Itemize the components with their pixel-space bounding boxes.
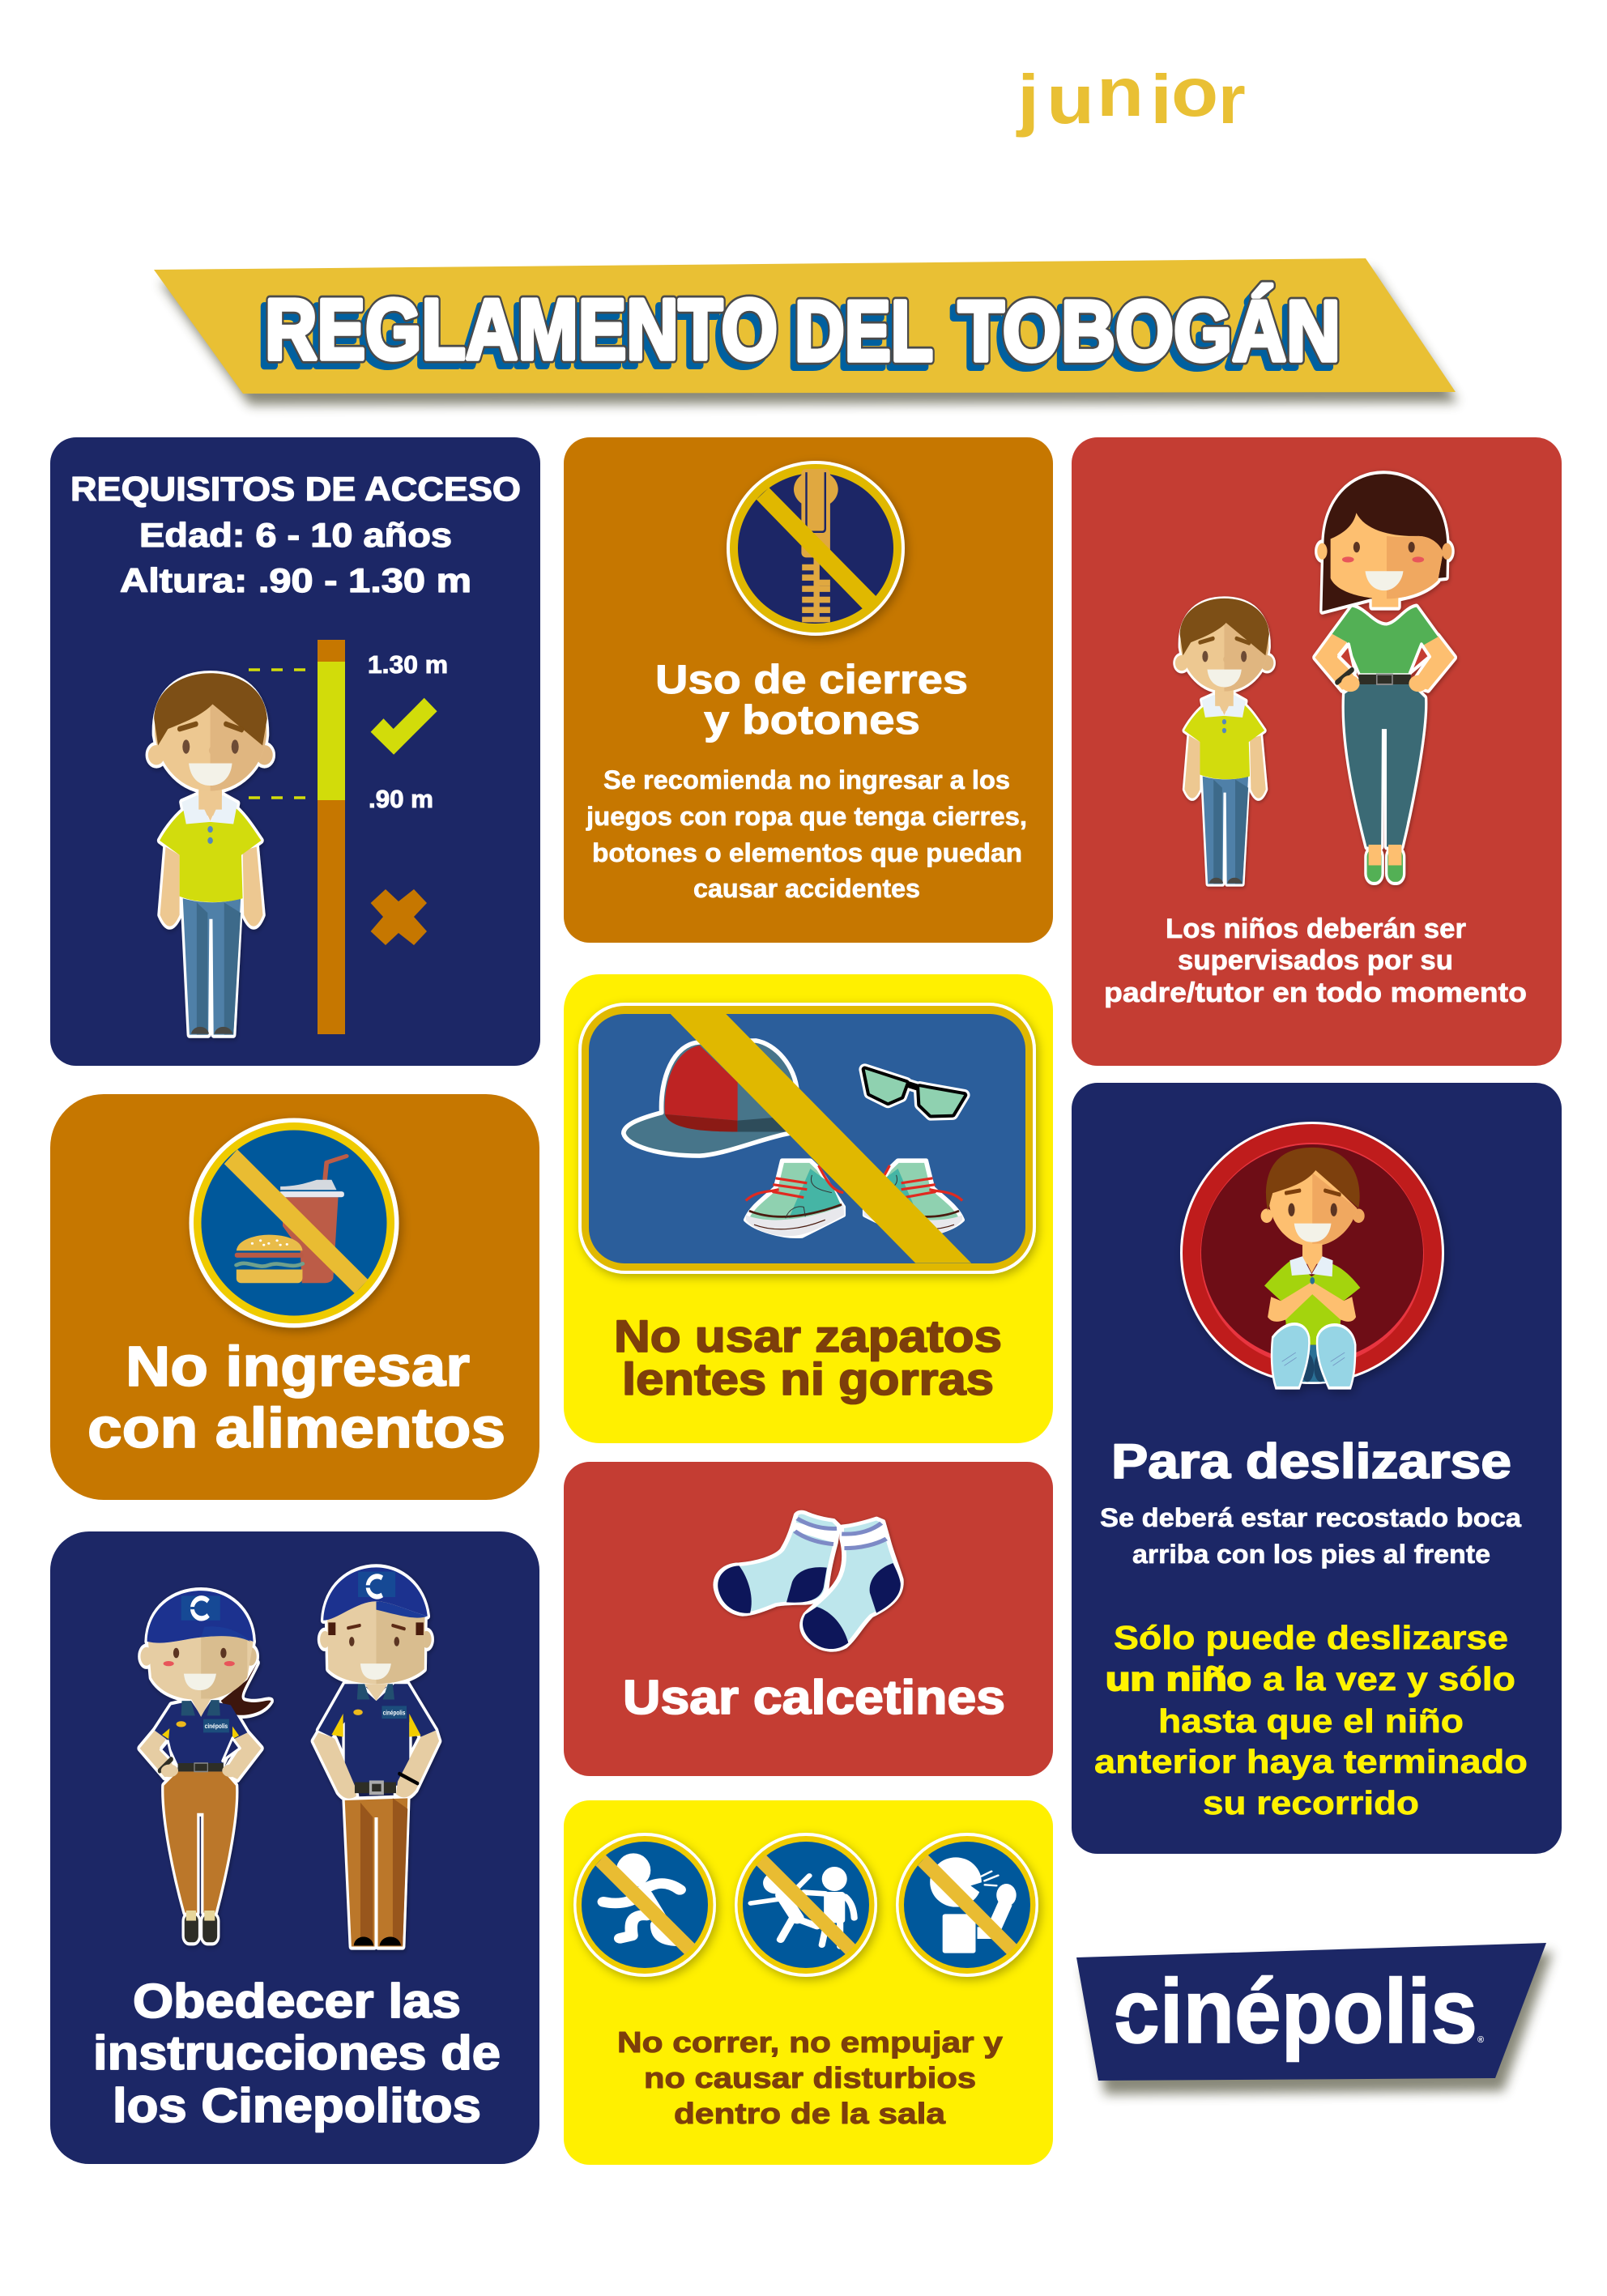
heading: no usar zapatos: No usar zapatos bbox=[614, 1310, 1002, 1361]
panel: supervision bbox=[1072, 437, 1562, 1066]
logo: junior: o bbox=[1171, 54, 1218, 131]
heading: requisitos bbox=[70, 470, 521, 599]
icon: cross bbox=[371, 889, 427, 945]
text: supervision: supervisados por su bbox=[1178, 945, 1453, 976]
heading: no usar zapatos: lentes ni gorras bbox=[622, 1353, 994, 1404]
logo: cinepolis bbox=[1076, 1943, 1553, 2094]
panel: alimentos bbox=[50, 1094, 539, 1500]
text: instrucciones: arriba con los pies al frente bbox=[1132, 1540, 1490, 1569]
panel: zapatos lentes gorras bbox=[564, 974, 1053, 1443]
logo: junior: i bbox=[1150, 62, 1172, 138]
logo: junior: u bbox=[1046, 62, 1094, 138]
icon: socks bbox=[715, 1512, 902, 1650]
logo: junior: j bbox=[1016, 62, 1039, 138]
text: no correr: dentro de la sala bbox=[674, 2097, 946, 2130]
text: instrucciones: Se deberá estar recostado boca bbox=[1100, 1503, 1521, 1532]
logo: cinepolis: cinépolis bbox=[1113, 1961, 1477, 2062]
boy figure small bbox=[1175, 598, 1273, 884]
figure: man staff bbox=[313, 1567, 439, 1946]
mother figure bbox=[1315, 474, 1455, 882]
text: no correr: no causar disturbios bbox=[644, 2061, 976, 2094]
title text bbox=[259, 282, 1341, 386]
heading: requisitos: REQUISITOS DE ACCESO bbox=[70, 470, 521, 508]
heading: no ingresar bbox=[87, 1335, 505, 1459]
logo: junior: n bbox=[1097, 54, 1144, 131]
icon: sneakers bbox=[746, 1161, 962, 1236]
icon: boy on slide bbox=[1180, 1122, 1444, 1388]
title text: TOBOGÁN bbox=[958, 283, 1341, 379]
icon: no pushing bbox=[735, 1833, 877, 1977]
title text: DEL bbox=[795, 283, 933, 379]
heading: usar calcetines: Usar calcetines bbox=[623, 1671, 1005, 1724]
text: advertencia en amarillo bbox=[1094, 1619, 1528, 1821]
text: instrucciones bbox=[1100, 1503, 1521, 1569]
logo: junior bbox=[1016, 54, 1246, 138]
icon: no running bbox=[573, 1833, 716, 1977]
illustration: prohibited items bbox=[578, 1003, 1036, 1274]
title text: REGLAMENTO bbox=[259, 288, 772, 384]
boy figure bbox=[148, 673, 273, 1035]
title text: DEL bbox=[795, 283, 933, 379]
label: .90 m: .90 m bbox=[369, 785, 433, 813]
heading: no ingresar: con alimentos bbox=[87, 1396, 505, 1459]
text: no correr: No correr, no empujar y bbox=[617, 2026, 1003, 2059]
title text: REGLAMENTO bbox=[265, 282, 778, 377]
icon: check mark bbox=[371, 698, 437, 755]
text: supervision: Los niños deberán ser bbox=[1166, 914, 1466, 944]
height bar chart bbox=[249, 640, 345, 1034]
figure: woman staff: cinépolis bbox=[205, 1724, 228, 1730]
title text: REGLAMENTO bbox=[265, 282, 778, 377]
heading: no usar zapatos bbox=[614, 1310, 1002, 1404]
title text: TOBOGÁN bbox=[958, 283, 1341, 379]
text: recomendacion: juegos con ropa que tenga cierres, bbox=[586, 802, 1027, 831]
heading: para deslizarse: Para deslizarse bbox=[1111, 1434, 1511, 1489]
text: advertencia en amarillo: su recorrido bbox=[1203, 1784, 1419, 1821]
panel: para deslizarse bbox=[1072, 1083, 1562, 1854]
panel: cinepolitos bbox=[50, 1531, 539, 2164]
heading: obedecer: instrucciones de bbox=[93, 2026, 501, 2080]
text: advertencia en amarillo: hasta que el niño bbox=[1158, 1702, 1464, 1740]
heading: requisitos: Altura: .90 - 1.30 m bbox=[120, 561, 471, 599]
text: advertencia en amarillo: anterior haya terminado bbox=[1094, 1743, 1528, 1780]
figure: woman staff bbox=[140, 1591, 271, 1942]
logo: junior: r bbox=[1218, 62, 1246, 138]
heading: obedecer bbox=[93, 1974, 501, 2132]
heading: uso de cierres: y botones bbox=[704, 697, 920, 743]
logo: cinepolis: ® bbox=[1477, 2035, 1484, 2045]
title banner bbox=[154, 258, 1458, 405]
icon: glasses bbox=[865, 1069, 964, 1115]
title text: DEL bbox=[789, 290, 927, 386]
icon: no shouting bbox=[896, 1833, 1038, 1977]
heading: uso de cierres bbox=[655, 657, 968, 743]
text: recomendacion bbox=[586, 765, 1027, 903]
panel: cierres y botones bbox=[564, 437, 1053, 943]
panel: no correr bbox=[564, 1800, 1053, 2165]
heading: requisitos: Edad: 6 - 10 años bbox=[139, 516, 452, 554]
title text: TOBOGÁN bbox=[953, 290, 1335, 386]
figure: man staff: cinépolis bbox=[383, 1710, 405, 1717]
icon: cap bbox=[624, 1041, 797, 1156]
panel: requisitos de acceso bbox=[50, 437, 540, 1066]
text: advertencia en amarillo: a la vez y sólo bbox=[1263, 1660, 1515, 1698]
heading: obedecer: Obedecer las bbox=[133, 1974, 461, 2028]
text: recomendacion: botones o elementos que puedan bbox=[592, 838, 1022, 867]
text: recomendacion: Se recomienda no ingresar a los bbox=[603, 765, 1010, 794]
text: advertencia en amarillo: Sólo puede deslizarse bbox=[1114, 1619, 1508, 1656]
text: supervision bbox=[1104, 914, 1527, 1008]
text: no correr bbox=[617, 2026, 1003, 2130]
text: advertencia en amarillo: un niño bbox=[1106, 1660, 1251, 1698]
heading: obedecer: los Cinepolitos bbox=[113, 2079, 481, 2132]
heading: uso de cierres: Uso de cierres bbox=[655, 657, 968, 702]
icon: no food bbox=[190, 1118, 399, 1328]
panel: calcetines bbox=[564, 1462, 1053, 1776]
label: 1.30 m: 1.30 m bbox=[368, 650, 448, 679]
icon: no zipper bbox=[727, 461, 905, 636]
text: supervision: padre/tutor en todo momento bbox=[1104, 978, 1527, 1008]
heading: no ingresar: No ingresar bbox=[126, 1335, 470, 1398]
text: recomendacion: causar accidentes bbox=[693, 874, 920, 903]
